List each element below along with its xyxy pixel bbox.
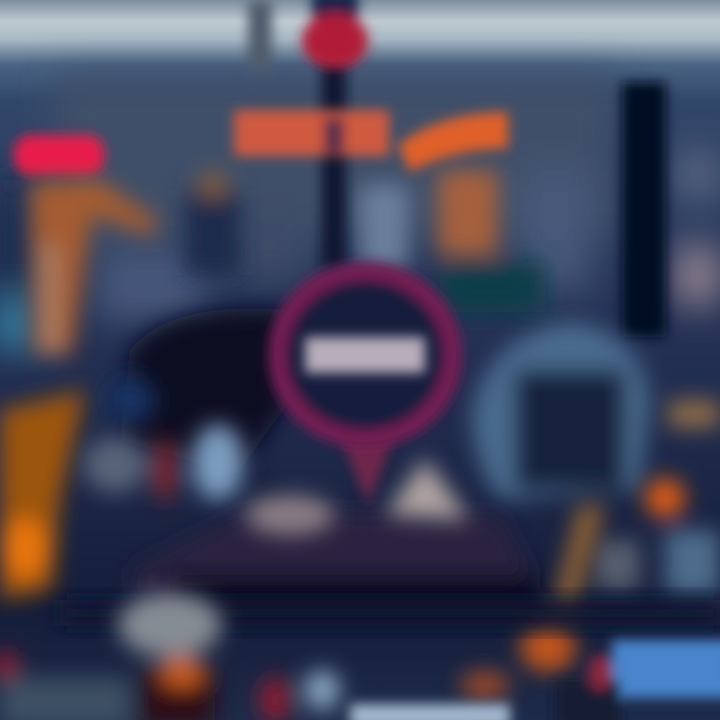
- distant skyline: [0, 75, 720, 350]
- light blue blobs lower left: [83, 375, 244, 502]
- dark mound: [130, 510, 550, 615]
- map pin ring: [277, 271, 453, 505]
- bottom right blue panel: [350, 640, 720, 720]
- dark tower: [622, 82, 666, 337]
- pale peaks on mound: [245, 458, 470, 535]
- orange crane: [30, 180, 160, 355]
- grey mast: [248, 0, 272, 70]
- lower left figure: [0, 593, 340, 720]
- orange diagonal beam lower right: [460, 505, 605, 699]
- dark strip across lower scene: [60, 600, 720, 626]
- red ball beacon: [302, 0, 368, 69]
- pale label bar: [305, 337, 425, 373]
- orange figure right of banner: [438, 170, 545, 312]
- ring disc: [277, 271, 453, 439]
- right blue building cluster: [472, 322, 650, 500]
- orange banner: [234, 110, 508, 172]
- left orange column: [0, 390, 85, 600]
- dark buildings behind banner: [185, 170, 408, 275]
- central dark pole: [322, 60, 346, 270]
- right side lights: [595, 400, 720, 595]
- red crane cap: [14, 135, 104, 175]
- pin tail: [342, 440, 392, 505]
- dark mass left of ring: [120, 308, 290, 490]
